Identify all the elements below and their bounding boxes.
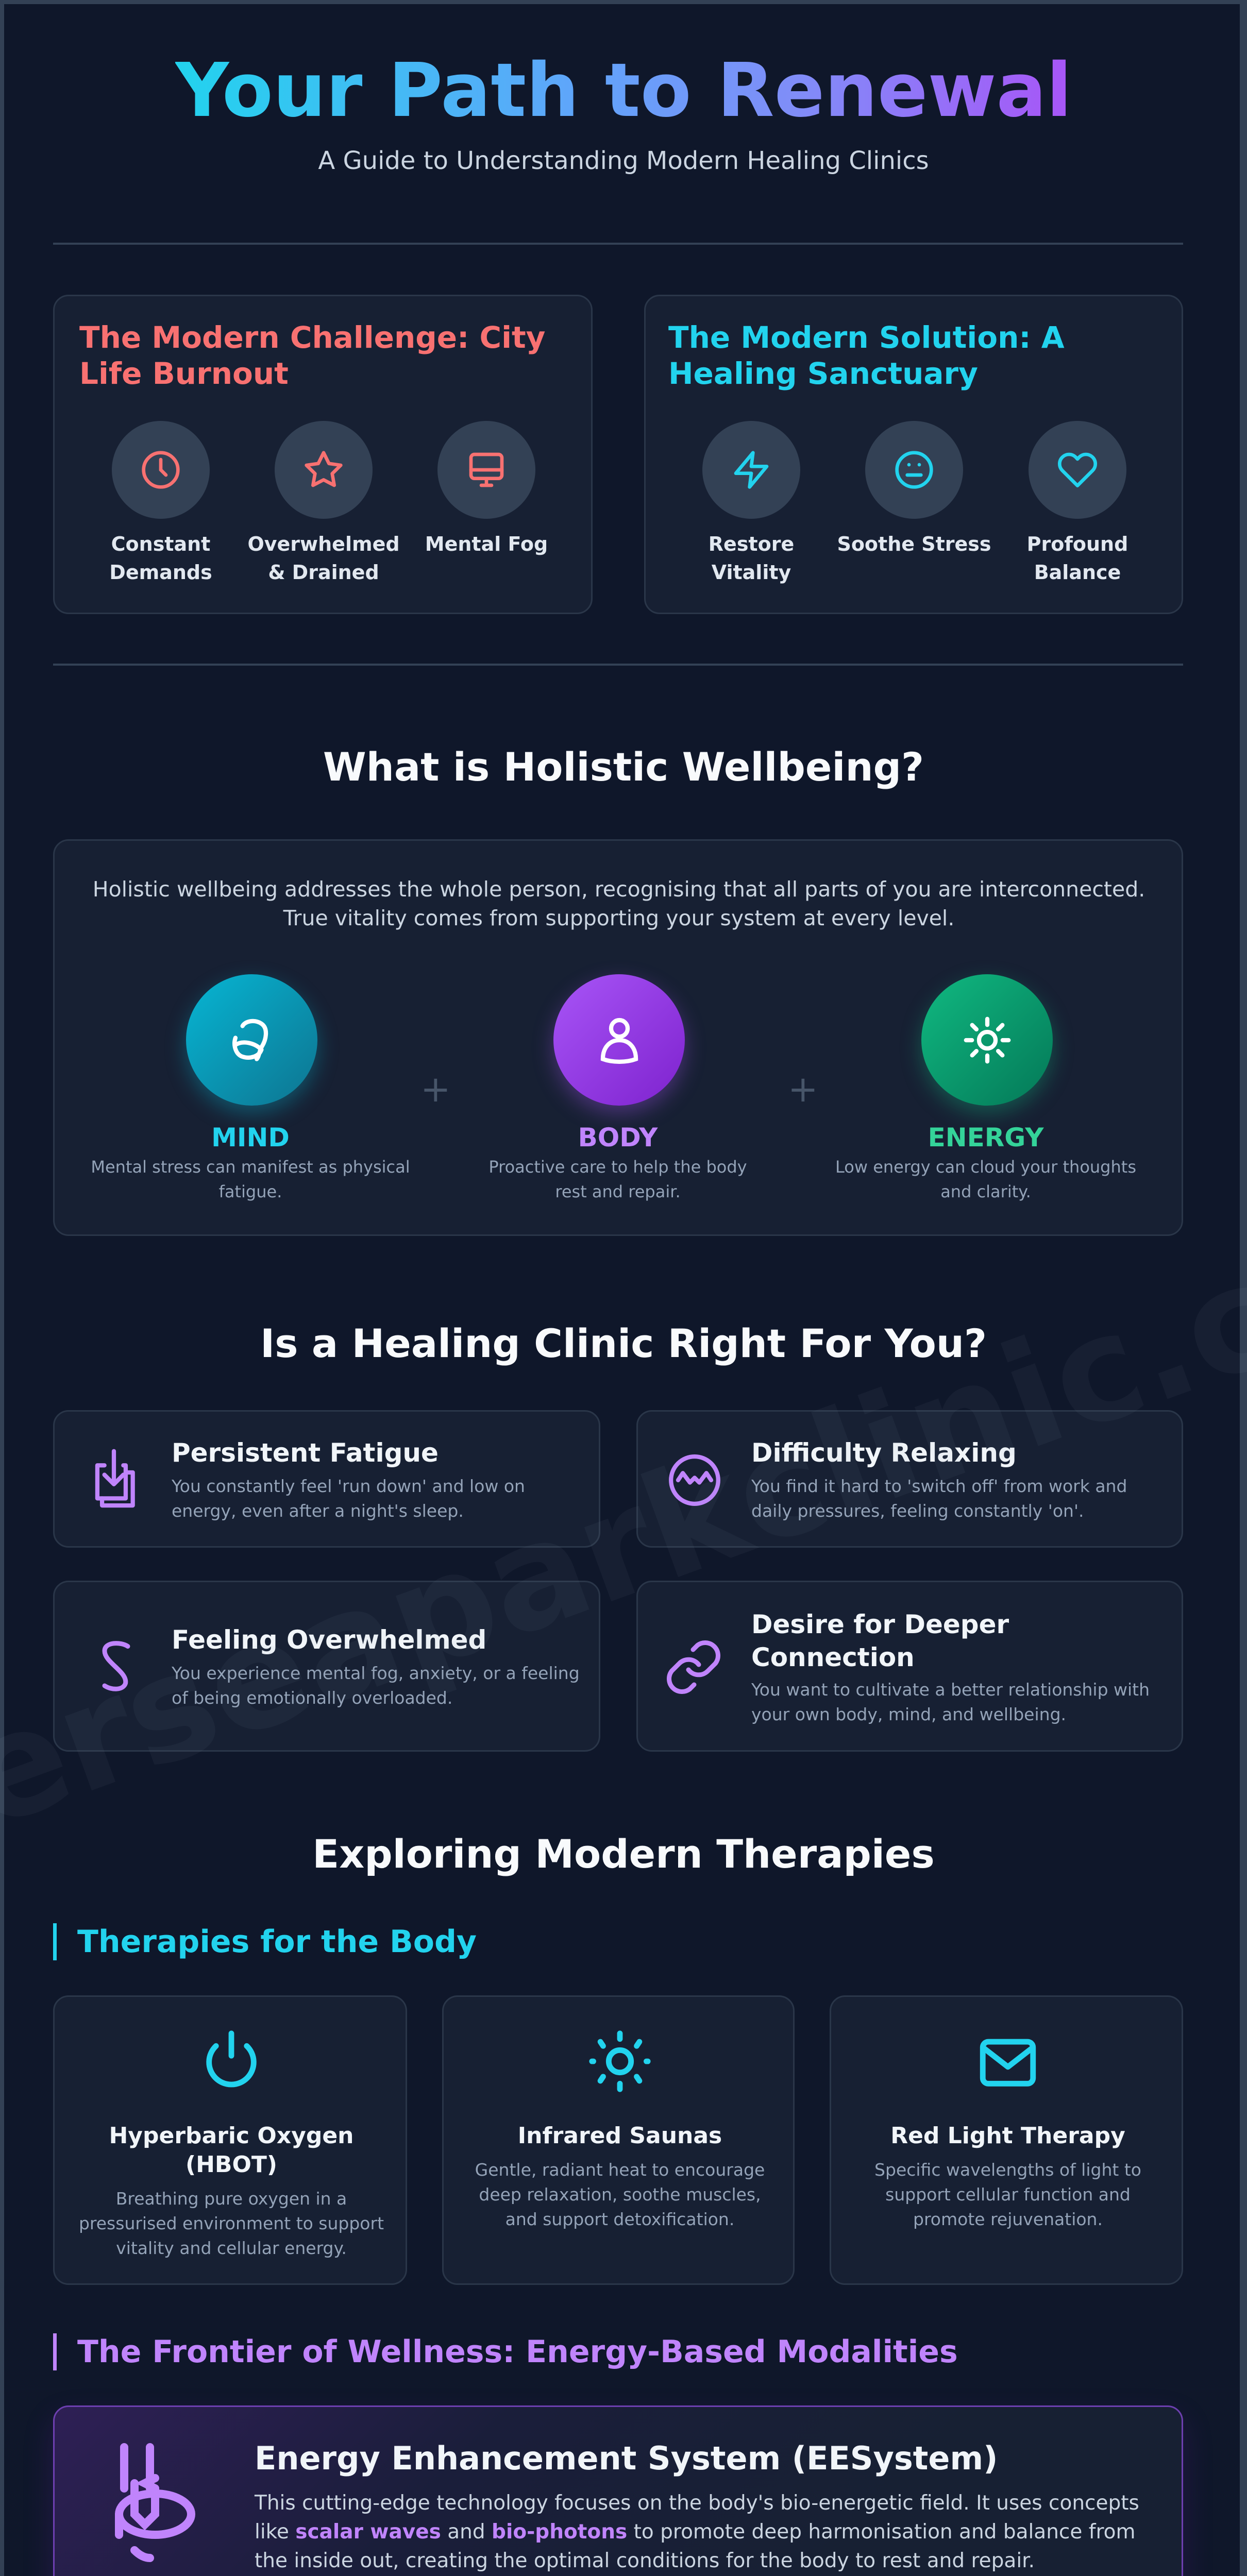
desc: You want to cultivate a better relationship with your own body, mind, and wellbeing. xyxy=(751,1680,1150,1724)
label: Restore Vitality xyxy=(709,533,794,584)
title: Desire for Deeper Connection xyxy=(751,1609,1009,1672)
label: Overwhelmed & Drained xyxy=(247,533,400,584)
title: Feeling Overwhelmed xyxy=(172,1625,486,1655)
icon: mail xyxy=(980,2039,1036,2087)
desc: mind: Mental stress can manifest as physical fatigue. xyxy=(91,1157,410,1201)
card: red light xyxy=(830,1995,1183,2285)
icon: clock xyxy=(112,421,210,519)
desc: You find it hard to 'switch off' from work and daily pressures, feeling constantly 'on'. xyxy=(751,1476,1127,1521)
card: hbot xyxy=(53,1995,407,2285)
plus: + xyxy=(420,1068,451,1110)
card: fatigue xyxy=(53,1410,600,1548)
heading: right for you: Is a Healing Clinic Right For You? xyxy=(260,1320,987,1366)
desc: You experience mental fog, anxiety, or a feeling of being emotionally overloaded. xyxy=(172,1663,580,1708)
label: Mental Fog xyxy=(425,533,548,555)
subheading: frontier: The Frontier of Wellness: Energy-Based Modalities xyxy=(77,2334,958,2370)
label: Profound Balance xyxy=(1027,533,1128,584)
title: Red Light Therapy xyxy=(890,2123,1125,2149)
title: Difficulty Relaxing xyxy=(751,1438,1017,1468)
heading: holistic: What is Holistic Wellbeing? xyxy=(323,744,924,790)
title: Your Path to Renewal xyxy=(175,47,1072,133)
icon: sun xyxy=(589,2030,651,2092)
icon: body xyxy=(553,974,685,1106)
card: relaxing xyxy=(636,1410,1183,1548)
desc: body: Proactive care to help the body rest and repair. xyxy=(488,1157,747,1201)
heading: therapies: Exploring Modern Therapies xyxy=(312,1831,935,1877)
card: saunas xyxy=(442,1995,795,2285)
label: Constant Demands xyxy=(109,533,212,584)
solution heading: The Modern Solution: A Healing Sanctuary xyxy=(668,320,1065,391)
card: overwhelmed xyxy=(53,1581,600,1752)
intro text: Holistic wellbeing addresses the whole person, recognising that all parts of you are interconnected. xyxy=(93,877,1145,902)
intro text: True vitality comes from supporting your system at every level. xyxy=(283,906,954,930)
icon: star xyxy=(275,421,373,519)
desc: Breathing pure oxygen in a pressurised environment to support vitality and cellular energy. xyxy=(79,2189,384,2258)
panel: eesystem xyxy=(53,2405,1183,2576)
desc: Specific wavelengths of light to support cellular function and promote rejuvenation. xyxy=(874,2160,1141,2229)
label: body: BODY xyxy=(578,1123,658,1153)
desc: You constantly feel 'run down' and low on energy, even after a night's sleep. xyxy=(172,1476,525,1521)
title: Energy Enhancement System (EESystem) xyxy=(255,2439,998,2477)
panel: solution xyxy=(644,295,1183,614)
icon: zap xyxy=(702,421,800,519)
icon: mind xyxy=(186,974,317,1106)
icon: link xyxy=(667,1640,720,1694)
card: connection xyxy=(636,1581,1183,1752)
icon: eesystem xyxy=(115,2443,195,2562)
icon: wave circle xyxy=(669,1454,720,1506)
icon: face xyxy=(865,421,963,519)
panel: holistic xyxy=(53,839,1183,1236)
challenge heading: The Modern Challenge: City Life Burnout xyxy=(79,320,545,391)
icon: layers download xyxy=(95,1449,135,1507)
label: mind: MIND xyxy=(211,1123,290,1153)
icon: power xyxy=(206,2030,257,2088)
body text: This cutting-edge technology focuses on the body's bio-energetic field. It uses concepts like scalar waves and bio-photons to promote deep harmonisation and balance from the inside out, creating the optimal conditions for the body to rest and repair. xyxy=(255,2492,1139,2572)
intro text xyxy=(93,877,1145,930)
panel: challenge xyxy=(53,295,593,614)
title: Infrared Saunas xyxy=(518,2123,722,2149)
title: Persistent Fatigue xyxy=(172,1438,439,1468)
subtitle: A Guide to Understanding Modern Healing Clinics xyxy=(318,146,929,175)
desc: Gentle, radiant heat to encourage deep relaxation, soothe muscles, and support detoxification. xyxy=(475,2160,765,2229)
title: Hyperbaric Oxygen (HBOT) xyxy=(109,2123,354,2178)
desc: energy: Low energy can cloud your thoughts and clarity. xyxy=(835,1157,1136,1201)
icon: s curve xyxy=(102,1641,130,1691)
label: energy: ENERGY xyxy=(928,1123,1043,1153)
label: Soothe Stress xyxy=(837,533,991,555)
icon: energy xyxy=(921,974,1053,1106)
icon: monitor xyxy=(437,421,535,519)
plus: + xyxy=(788,1068,818,1110)
icon: heart xyxy=(1029,421,1126,519)
subheading: body therapies: Therapies for the Body xyxy=(77,1924,477,1960)
